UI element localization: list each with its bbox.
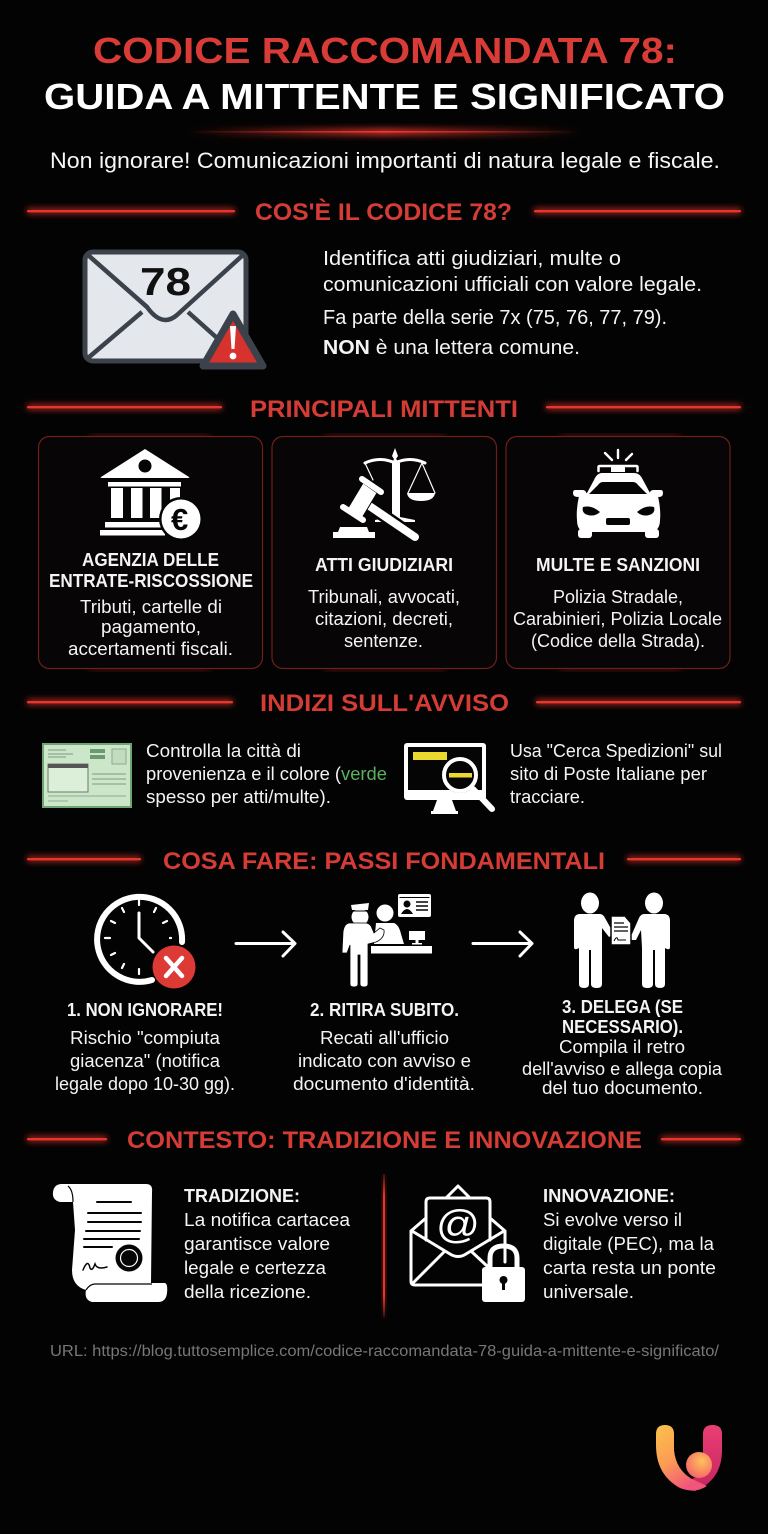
text block: innovazione: carta resta un ponte xyxy=(543,1258,716,1278)
section heading: cosa fare xyxy=(27,848,741,875)
step 3 text: 3. DELEGA (SE xyxy=(562,997,683,1017)
section heading: contesto: CONTESTO: TRADIZIONE E INNOVAZIONE xyxy=(127,1127,642,1154)
text block: check origin city: Controlla la città di xyxy=(146,741,301,761)
section heading: indizi sull'avviso xyxy=(27,690,741,717)
subtitle: Non ignorare! Comunicazioni importanti di natura legale e fiscale. xyxy=(50,148,720,173)
source url: URL: https://blog.tuttosemplice.com/codice-raccomandata-78-guida-a-mittente-e-significato/ xyxy=(50,1343,720,1360)
text block: tradizione: TRADIZIONE: xyxy=(184,1186,300,1206)
section heading: indizi sull'avviso: INDIZI SULL'AVVISO xyxy=(260,690,509,717)
card text: citazioni, decreti, xyxy=(315,609,453,629)
icon: gavel and scales xyxy=(333,448,435,538)
section heading: principali mittenti xyxy=(27,396,741,423)
step 3 text xyxy=(522,997,723,1098)
text block: description of code 78 xyxy=(323,248,702,359)
title: GUIDA A MITTENTE E SIGNIFICATO xyxy=(44,76,725,117)
icon: two people exchanging document xyxy=(574,892,670,988)
text block: innovazione: INNOVAZIONE: xyxy=(543,1186,675,1206)
step 1 text: legale dopo 10-30 gg). xyxy=(55,1074,235,1094)
step 1 text xyxy=(55,1000,235,1094)
title: CODICE RACCOMANDATA 78: xyxy=(93,30,677,71)
text block: tradizione: legale e certezza xyxy=(184,1258,327,1278)
step 2 text: indicato con avviso e xyxy=(298,1051,471,1071)
section heading: principali mittenti: PRINCIPALI MITTENTI xyxy=(250,396,518,423)
card title: ATTI GIUDIZIARI xyxy=(315,555,453,575)
icon: monitor and magnifier xyxy=(404,743,492,814)
step 1 text: giacenza" (notifica xyxy=(70,1051,221,1071)
card text: accertamenti fiscali. xyxy=(68,639,233,659)
title xyxy=(44,30,725,117)
card text: sentenze. xyxy=(344,631,423,651)
icon: green postcard xyxy=(43,744,131,807)
text block: check origin city: spesso per atti/multe). xyxy=(146,787,331,807)
step 1 text: Rischio "compiuta xyxy=(70,1028,221,1048)
icon: police car xyxy=(573,450,663,538)
card title: AGENZIA DELLE xyxy=(82,550,219,570)
card text: Tribunali, avvocati, xyxy=(308,587,460,607)
icon: email with padlock xyxy=(411,1186,525,1302)
step 3 text: Compila il retro xyxy=(559,1037,685,1057)
vertical divider xyxy=(382,1174,386,1317)
section heading: cos'è il codice 78: COS'È IL CODICE 78? xyxy=(255,198,512,226)
text block: tradizione: della ricezione. xyxy=(184,1282,311,1302)
card text: Tributi, cartelle di xyxy=(80,597,222,617)
card text: pagamento, xyxy=(101,617,201,637)
icon: clock with red x xyxy=(97,897,196,988)
step 2 text xyxy=(293,1000,475,1094)
card text xyxy=(68,597,233,659)
text block: description of code 78: comunicazioni ufficiali con valore legale. xyxy=(323,274,702,296)
text block: innovazione: universale. xyxy=(543,1282,634,1302)
step 2 text: Recati all'ufficio xyxy=(320,1028,449,1048)
step 3 text: NECESSARIO). xyxy=(562,1017,683,1037)
text block: description of code 78: Fa parte della serie 7x (75, 76, 77, 79). xyxy=(323,307,667,329)
card text xyxy=(513,587,722,651)
section heading: cos'è il codice 78 xyxy=(27,198,741,226)
arrow: step 2 to step 3 xyxy=(473,932,532,956)
section heading: contesto xyxy=(27,1127,741,1154)
text block: track shipment: tracciare. xyxy=(510,787,585,807)
panel: atti giudiziari xyxy=(272,434,496,671)
text block: innovazione: Si evolve verso il xyxy=(543,1210,682,1230)
icon: bank with euro xyxy=(100,449,203,541)
card text xyxy=(308,587,460,651)
icon: envelope 78 with warning xyxy=(85,252,263,366)
text block: innovazione xyxy=(543,1186,716,1302)
icon: bank with euro: € xyxy=(171,502,188,537)
icon: email with padlock: @ xyxy=(436,1203,480,1247)
card title xyxy=(49,550,253,591)
card text: Carabinieri, Polizia Locale xyxy=(513,609,722,629)
arrow: step 1 to step 2 xyxy=(236,932,295,956)
panel: agenzia delle entrate xyxy=(38,434,262,671)
text block: check origin city xyxy=(146,741,387,807)
icon: scroll with seal xyxy=(53,1184,167,1302)
text block: tradizione xyxy=(184,1186,351,1302)
step 3 text: dell'avviso e allega copia xyxy=(522,1059,723,1079)
text block: innovazione: digitale (PEC), ma la xyxy=(543,1234,715,1254)
card text: Polizia Stradale, xyxy=(553,587,683,607)
card title: MULTE E SANZIONI xyxy=(536,555,700,575)
text block: description of code 78: Identifica atti giudiziari, multe o xyxy=(323,248,621,270)
step 1 text: 1. NON IGNORARE! xyxy=(67,1000,223,1020)
icon: envelope 78 with warning: 78 xyxy=(140,261,191,304)
text block: check origin city: provenienza e il colore (verde xyxy=(146,764,387,784)
text block: tradizione: La notifica cartacea xyxy=(184,1210,351,1230)
step 3 text: del tuo documento. xyxy=(542,1078,703,1098)
step 2 text: documento d'identità. xyxy=(293,1074,475,1094)
text block: track shipment: Usa "Cerca Spedizioni" sul xyxy=(510,741,722,761)
step 2 text: 2. RITIRA SUBITO. xyxy=(310,1000,459,1020)
card title: ENTRATE-RISCOSSIONE xyxy=(49,571,253,591)
title divider xyxy=(187,129,582,135)
logo xyxy=(656,1425,722,1491)
card text: (Codice della Strada). xyxy=(531,631,705,651)
text block: track shipment: sito di Poste Italiane per xyxy=(510,764,707,784)
icon: post office counter xyxy=(342,894,432,987)
text block: tradizione: garantisce valore xyxy=(184,1234,330,1254)
text block: track shipment xyxy=(510,741,722,807)
panel: multe e sanzioni xyxy=(506,434,730,671)
text block: description of code 78: NON è una lettera comune. xyxy=(323,337,580,359)
section heading: cosa fare: COSA FARE: PASSI FONDAMENTALI xyxy=(163,848,605,875)
